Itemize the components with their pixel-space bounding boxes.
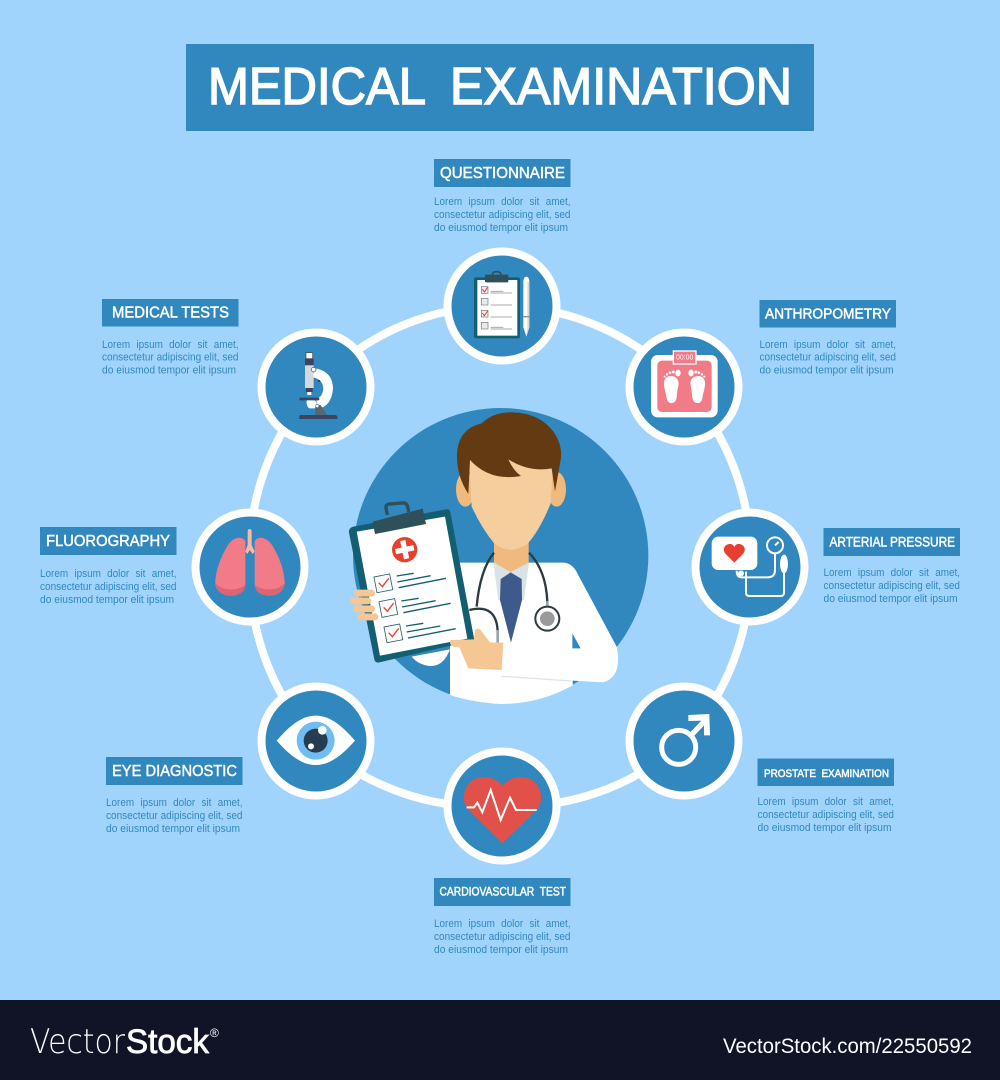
panel: questionnaire <box>434 159 570 234</box>
doctor: hands <box>350 590 503 670</box>
title: MEDICAL <box>208 58 426 116</box>
panel: fluorography: consectetur adipiscing elit, sed <box>40 581 176 593</box>
panel: fluorography <box>40 527 176 606</box>
footer bar with watermark: Stock <box>126 1023 210 1061</box>
title <box>186 44 814 131</box>
panel: questionnaire: do eiusmod tempor elit ipsum <box>434 222 568 234</box>
panel: cardiovascular test: Lorem ipsum dolor sit amet, <box>434 918 570 930</box>
footer bar with watermark: Vector <box>30 1022 125 1062</box>
panel: arterial pressure: do eiusmod tempor elit ipsum <box>824 593 958 605</box>
panel: eye diagnostic: EYE DIAGNOSTIC <box>112 763 237 780</box>
ring connecting the examination steps <box>250 306 750 807</box>
panel: prostate examination: do eiusmod tempor elit ipsum <box>758 822 892 834</box>
doctor: neck and shirt <box>493 540 529 643</box>
title: EXAMINATION <box>450 58 792 116</box>
doctor: stethoscope <box>469 553 559 643</box>
icon: male symbol <box>662 714 710 764</box>
footer bar with watermark <box>0 1000 1000 1080</box>
icon: clipboard and pen <box>474 272 529 338</box>
icon: eye <box>277 716 355 765</box>
step circle: prostate examination <box>630 686 738 796</box>
panel: cardiovascular test: do eiusmod tempor elit ipsum <box>434 944 568 956</box>
panel: eye diagnostic: do eiusmod tempor elit ipsum <box>106 823 240 835</box>
panel: cardiovascular test <box>434 878 570 956</box>
panel: anthropometry: do eiusmod tempor elit ipsum <box>760 364 894 376</box>
panel: medical tests: do eiusmod tempor elit ipsum <box>102 364 236 376</box>
icon: lungs <box>215 529 285 596</box>
panel: anthropometry <box>760 300 896 376</box>
icon: blood pressure monitor <box>712 537 788 596</box>
icon: microscope <box>299 353 337 419</box>
step circle: anthropometry <box>630 332 738 442</box>
panel: arterial pressure: consectetur adipiscing elit, sed <box>824 580 960 592</box>
panel: cardiovascular test: consectetur adipiscing elit, sed <box>434 931 570 943</box>
panel: eye diagnostic <box>106 757 242 835</box>
panel: questionnaire: consectetur adipiscing elit, sed <box>434 209 570 221</box>
panel: fluorography: do eiusmod tempor elit ipsum <box>40 594 174 606</box>
step circle: questionnaire <box>448 252 556 360</box>
step circle: cardiovascular test <box>448 752 556 860</box>
panel: prostate examination <box>758 758 894 834</box>
panel: questionnaire: QUESTIONNAIRE <box>440 165 565 182</box>
footer bar with watermark: VectorStock.com/22550592 <box>723 1034 972 1058</box>
doctor: coat <box>450 563 618 704</box>
panel: questionnaire: Lorem ipsum dolor sit amet, <box>434 196 570 208</box>
panel: medical tests: consectetur adipiscing elit, sed <box>102 352 238 364</box>
panel: prostate examination: PROSTATE EXAMINATION <box>764 768 889 780</box>
panel: eye diagnostic: consectetur adipiscing elit, sed <box>106 810 242 822</box>
central doctor illustration <box>349 408 648 704</box>
panel: medical tests <box>102 299 238 376</box>
footer bar with watermark: ® <box>210 1026 219 1040</box>
panel: medical tests: Lorem ipsum dolor sit amet, <box>102 339 238 351</box>
panel: arterial pressure <box>824 528 960 605</box>
step circle: arterial pressure <box>696 512 804 622</box>
clipboard <box>349 503 474 663</box>
panel: medical tests: MEDICAL TESTS <box>112 304 229 322</box>
panel: anthropometry: consectetur adipiscing elit, sed <box>760 352 896 364</box>
icon: bathroom scale with footprints: 00:00 <box>676 353 693 362</box>
panel: prostate examination: consectetur adipiscing elit, sed <box>758 809 894 821</box>
panel: eye diagnostic: Lorem ipsum dolor sit amet, <box>106 797 242 809</box>
panel: arterial pressure: ARTERIAL PRESSURE <box>830 534 955 550</box>
step circle: fluorography <box>196 512 304 622</box>
panel: fluorography: Lorem ipsum dolor sit amet, <box>40 568 176 580</box>
panel: arterial pressure: Lorem ipsum dolor sit amet, <box>824 567 960 579</box>
step circle: eye diagnostic <box>262 686 370 796</box>
icon: heart with pulse line <box>464 777 541 843</box>
step circle: medical tests <box>262 332 370 442</box>
doctor: head <box>456 412 566 550</box>
panel: fluorography: FLUOROGRAPHY <box>46 533 170 550</box>
panel: anthropometry: Lorem ipsum dolor sit amet, <box>760 339 896 351</box>
panel: prostate examination: Lorem ipsum dolor sit amet, <box>758 796 894 808</box>
panel: anthropometry: ANTHROPOMETRY <box>765 306 891 322</box>
panel: cardiovascular test: CARDIOVASCULAR TEST <box>440 884 567 898</box>
